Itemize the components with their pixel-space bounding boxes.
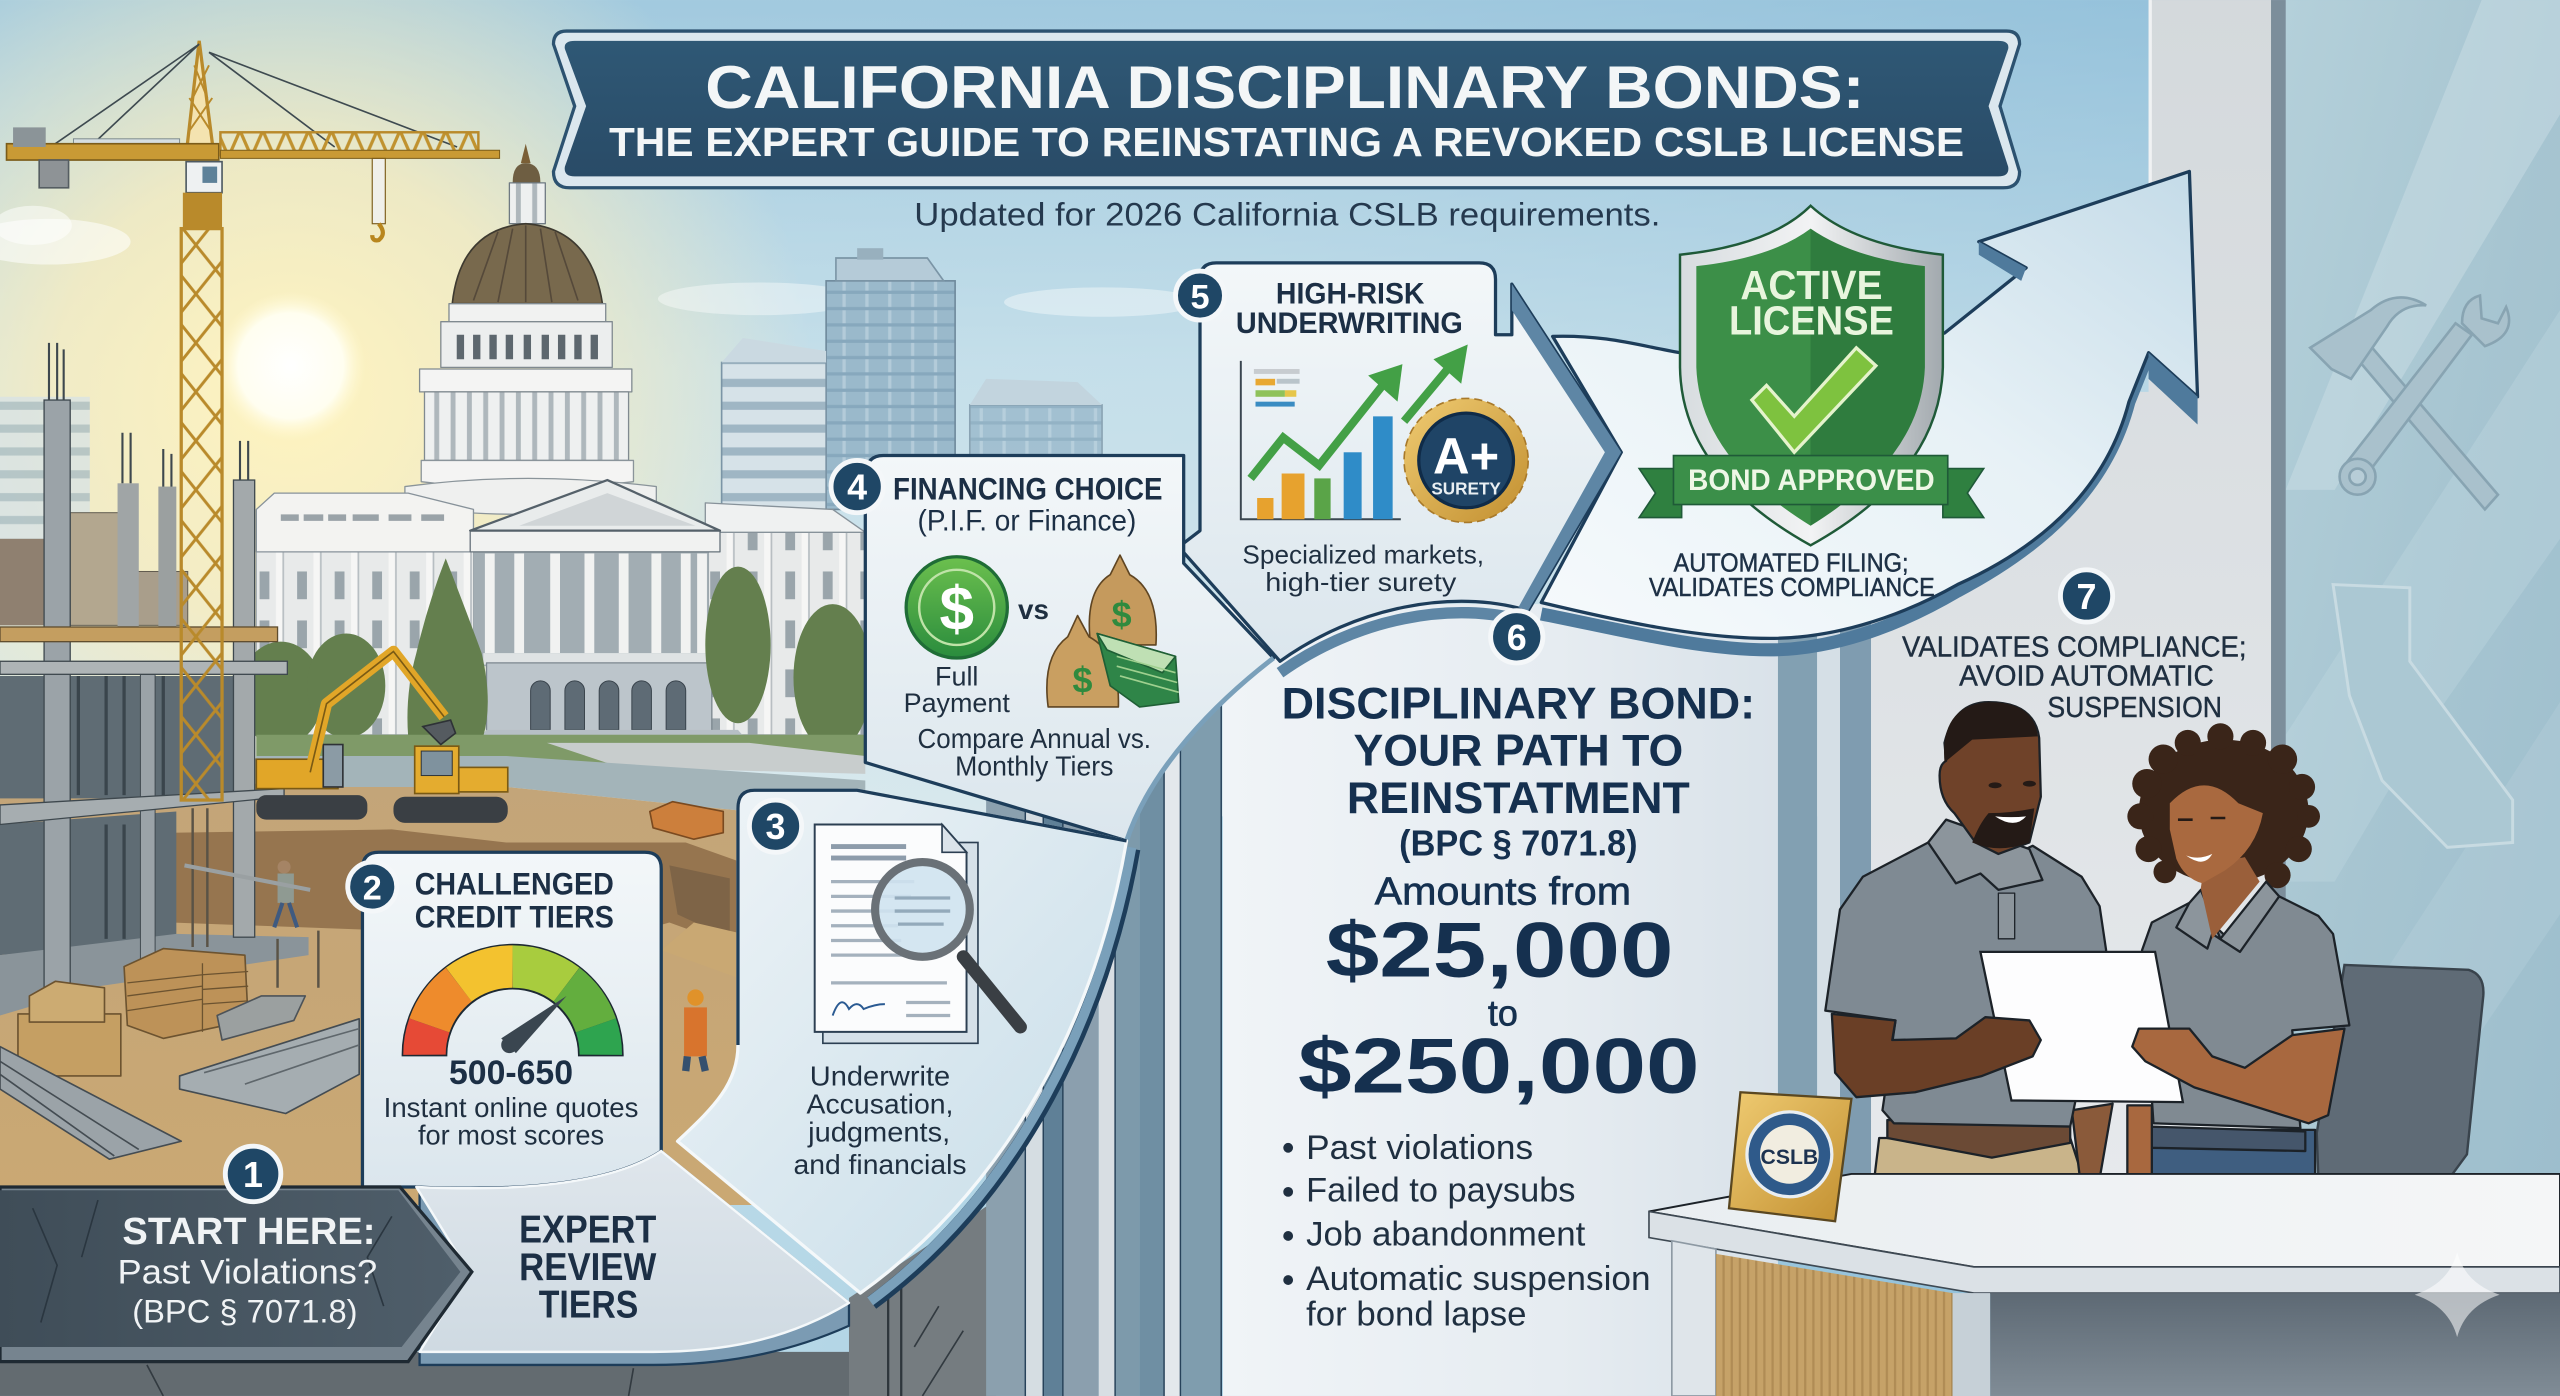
panel: step 4 financing choice [865, 456, 1273, 841]
illustration: excavators [256, 651, 508, 823]
illustration: woman reviewing document [2127, 723, 2349, 1179]
heading: CREDIT TIERS [415, 899, 614, 934]
panel: step 6 background [1223, 392, 2271, 1396]
heading: HIGH-RISK [1276, 278, 1424, 311]
concrete base strip with cracks [0, 1200, 996, 1396]
caption [384, 1092, 638, 1151]
illustration: hands and forearms over the document [1832, 1014, 2344, 1123]
caption: Underwrite [810, 1061, 950, 1092]
chart: credit gauge [403, 945, 622, 1055]
heading [1236, 278, 1463, 340]
amount range: to [1488, 992, 1518, 1033]
caption: Compare Annual vs. [918, 723, 1151, 754]
label [519, 1208, 656, 1327]
icon: money bags and cash: $ [1112, 594, 1132, 635]
illustration: document held by staff [1980, 952, 2183, 1102]
text: automated filing caption [1649, 547, 1935, 602]
heading [415, 867, 614, 934]
icon: A+ surety seal: SURETY [1431, 479, 1501, 499]
title text: THE EXPERT GUIDE TO REINSTATING A REVOKED CSLB LICENSE [609, 119, 1964, 165]
icon: full payment coin: $ [939, 575, 974, 644]
panel: step 5 high-risk underwriting [1179, 263, 1621, 673]
illustration: man reviewing document [1825, 702, 2113, 1179]
heading: FINANCING CHOICE [893, 472, 1162, 507]
window panel with diagonal reflections [2253, 0, 2560, 1179]
icon: step badge 6: 6 [1507, 617, 1527, 658]
icon: hammer and wrench watermark [2310, 296, 2509, 509]
list: bond triggers: Past violations [1306, 1129, 1533, 1167]
caption: for most scores [418, 1120, 604, 1151]
icon: step badge 2 [348, 862, 397, 911]
steel columns beside the curved path [986, 702, 1221, 1396]
icon: step badge 6 [1491, 611, 1543, 663]
illustration: reception desk [1649, 1174, 2560, 1396]
text: Past Violations? [118, 1253, 377, 1291]
heading: YOUR PATH TO [1353, 727, 1683, 776]
text block: step 6 disciplinary bond [1282, 679, 1755, 1109]
heading [1282, 679, 1755, 864]
icon: step badge 5 [1176, 271, 1224, 320]
subtitle: Updated for 2026 California CSLB requirements. [914, 195, 1660, 232]
text [118, 1210, 377, 1329]
icon: sparkle watermark [2415, 1252, 2500, 1337]
icon: CSLB plaque: CSLB [1761, 1146, 1818, 1169]
icon: step badge 7 [2060, 570, 2113, 622]
heading: DISCIPLINARY BOND: [1282, 679, 1755, 728]
heading: UNDERWRITING [1236, 307, 1463, 340]
icon: full payment coin [906, 557, 1007, 658]
title text [609, 53, 1964, 165]
score range: 500-650 [449, 1054, 573, 1092]
amount range [1298, 871, 1700, 1109]
caption: and financials [793, 1149, 967, 1180]
icon: step badge 3 [749, 800, 802, 852]
text block: step 7 compliance: SUSPENSION [2047, 692, 2222, 724]
amount range: $250,000 [1298, 1021, 1700, 1109]
list: bond triggers: for bond lapse [1306, 1296, 1527, 1334]
icon: A+ surety seal: A+ [1433, 428, 1499, 485]
caption: judgments, [807, 1116, 950, 1147]
icon: document with magnifier [815, 825, 1020, 1043]
title banner [553, 31, 2020, 188]
heading [893, 472, 1162, 538]
icon: A+ surety seal [1404, 398, 1528, 522]
label full payment: Payment [904, 688, 1010, 718]
skyline buildings [0, 248, 1102, 544]
icon: step badge 1 [225, 1146, 281, 1202]
caption [918, 723, 1151, 782]
text block: step 7 compliance: AVOID AUTOMATIC [1959, 661, 2214, 693]
panel: expert review tiers [416, 1151, 849, 1365]
icon: active license shield: ACTIVE [1740, 262, 1882, 308]
title text: CALIFORNIA DISCIPLINARY BONDS: [705, 53, 1864, 121]
icon: California outline watermark [2333, 585, 2513, 847]
caption [1242, 539, 1484, 597]
caption: Accusation, [807, 1089, 953, 1120]
wall column beside window [2149, 0, 2286, 1179]
list: bond triggers: Job abandonment [1306, 1216, 1586, 1254]
icon: step badge 5: 5 [1190, 279, 1210, 317]
ribbon: bond approved [1639, 456, 1984, 518]
label full payment: Full [935, 662, 978, 692]
heading: REINSTATMENT [1347, 774, 1690, 823]
illustration: construction ground [0, 735, 882, 1205]
caption: Monthly Tiers [955, 751, 1113, 782]
heading: (P.I.F. or Finance) [918, 505, 1136, 538]
list: bond triggers: Failed to paysubs [1306, 1172, 1576, 1210]
panel: step 3 underwriting review [678, 658, 1273, 1303]
icon: money bags and cash [1047, 555, 1179, 707]
icon: step badge 1: 1 [243, 1154, 263, 1195]
label: EXPERT [519, 1208, 656, 1251]
icon: active license shield: LICENSE [1729, 298, 1894, 344]
caption: Instant online quotes [384, 1092, 638, 1123]
illustration: capitol building [256, 144, 865, 745]
text: START HERE: [122, 1210, 376, 1252]
caption [793, 1061, 967, 1180]
text block: step 7 compliance: VALIDATES COMPLIANCE; [1902, 631, 2247, 663]
icon: step badge 7: 7 [2077, 576, 2097, 617]
label full payment [904, 662, 1010, 718]
list: bond triggers: Automatic suspension [1306, 1260, 1651, 1298]
caption: Specialized markets, [1242, 539, 1484, 569]
illustration: trees [238, 558, 872, 751]
icon: CSLB plaque [1729, 1092, 1851, 1221]
ribbon: bond approved: BOND APPROVED [1688, 464, 1935, 497]
illustration: tower crane [7, 41, 500, 800]
icon: step badge 4 [831, 460, 883, 513]
panel: step 2 challenged credit tiers [362, 852, 661, 1188]
amount range: Amounts from [1375, 871, 1631, 914]
label vs: vs [1018, 594, 1049, 625]
icon: step badge 3: 3 [766, 806, 786, 847]
heading: (BPC § 7071.8) [1399, 823, 1638, 864]
text: (BPC § 7071.8) [132, 1292, 358, 1329]
icon: money bags and cash: $ [1072, 659, 1092, 700]
illustration: office chair [2317, 965, 2483, 1179]
label: TIERS [539, 1284, 638, 1327]
chart: rising bars and arrows [1241, 345, 1468, 519]
heading: CHALLENGED [415, 867, 614, 902]
panel: step 1 start here [0, 1187, 472, 1362]
illustration: materials and workers [0, 802, 723, 1159]
list: bond triggers [1283, 1129, 1651, 1334]
arrow: large rising path arrow with shield backdrop [1541, 171, 2198, 650]
illustration: concrete frame with rebar [0, 343, 318, 1016]
text: automated filing caption: VALIDATES COMPLIANCE [1649, 572, 1935, 602]
caption: high-tier surety [1265, 567, 1456, 597]
label: REVIEW [519, 1246, 656, 1289]
amount range: $25,000 [1326, 905, 1673, 993]
icon: active license shield [1639, 206, 1984, 545]
text block: step 7 compliance [1902, 631, 2247, 724]
icon: step badge 2: 2 [363, 870, 382, 908]
icon: step badge 4: 4 [847, 467, 867, 508]
text: automated filing caption: AUTOMATED FILING; [1673, 547, 1909, 577]
